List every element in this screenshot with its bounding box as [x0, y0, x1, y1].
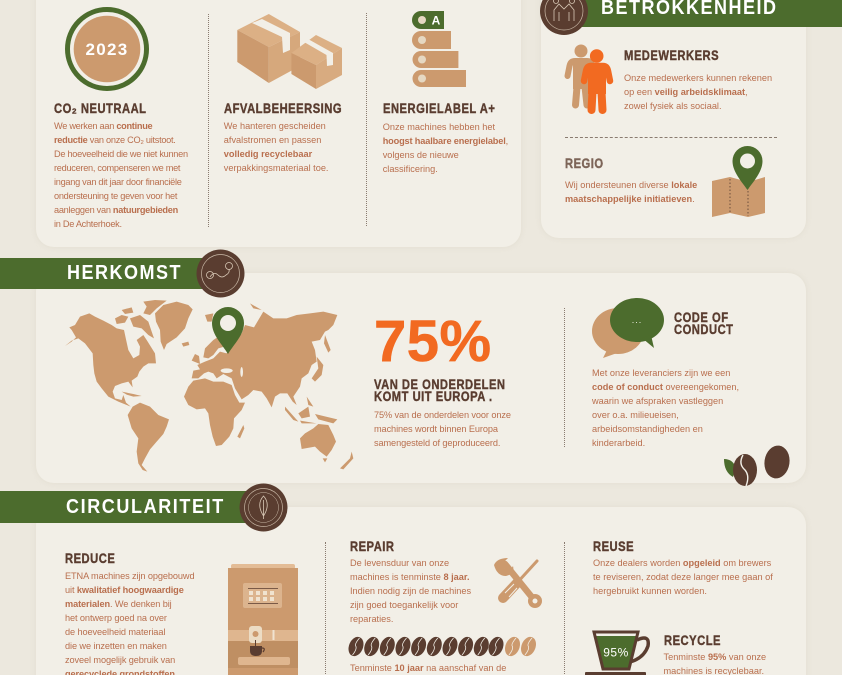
icon: speech bubbles: [592, 298, 664, 358]
text: code of conduct: kinderarbeid.: [592, 438, 645, 448]
divider: [565, 137, 777, 138]
text: reduce: uit kwalitatief hoogwaardige: [65, 585, 184, 595]
icon: route badge: [196, 250, 244, 298]
text: CO2 neutraal: aanleggen van natuurgebieden: [54, 205, 178, 215]
text: energielabel: volgens de nieuwe: [383, 150, 459, 160]
heading: van de onderdelen: VAN DE ONDERDELEN: [374, 377, 506, 392]
ribbon: betrokkenheid: [540, 0, 842, 35]
heading: afvalbeheersing: AFVALBEHEERSING: [224, 101, 342, 116]
ribbon bar: [570, 0, 842, 27]
text: regio: Wij ondersteunen diverse lokale: [565, 180, 697, 190]
heading: regio: REGIO: [565, 156, 604, 171]
text: reuse: te reviseren, zodat deze langer mee gaan of: [593, 572, 773, 582]
text: onderdelen: machines wordt binnen Europa: [374, 424, 498, 434]
heading: CO2 neutraal: CO₂ NEUTRAAL: [54, 101, 146, 116]
text: CO2 neutraal: De hoeveelheid die we niet kunnen: [54, 149, 188, 159]
text: onderdelen: 75% van de onderdelen voor onze: [374, 410, 511, 420]
chart: bean rating 10 of 12: [348, 636, 536, 656]
panel: milieu: [36, 0, 521, 247]
text: reduce: de hoeveelheid materiaal: [65, 627, 165, 637]
stat: 75%: 75%: [374, 309, 492, 374]
heading: medewerkers: MEDEWERKERS: [624, 48, 719, 63]
icon: 2023 badge: 2023: [85, 40, 129, 59]
text: code of conduct: waarin we afspraken vastleggen: [592, 396, 723, 406]
icon: coffee machine: [228, 564, 298, 675]
text: repair note: Tenminste 10 jaar na aanschaf van de: [350, 663, 506, 673]
text: onderdelen: [374, 410, 511, 448]
icon: energy label: A: [432, 14, 441, 28]
text: medewerkers: [624, 73, 772, 111]
text: reuse: [593, 558, 773, 596]
icon: wrench and screwdriver: [494, 558, 542, 608]
divider: [325, 542, 326, 675]
text: afvalbeheersing: verpakkingsmateriaal toe.: [224, 163, 328, 173]
icon: hands badge: [540, 0, 588, 35]
text: code of conduct: code of conduct overeengekomen,: [592, 382, 739, 392]
text: repair: zijn goed toegankelijk voor: [350, 600, 458, 610]
text: repair: De levensduur van onze: [350, 558, 449, 568]
heading: van de onderdelen: [374, 377, 506, 404]
divider: [564, 542, 565, 675]
divider: [208, 14, 209, 227]
icon: 2023 badge: [65, 7, 149, 91]
icon: map with pin: [712, 146, 765, 217]
panel: betrokkenheid: [541, 0, 806, 238]
text: code of conduct: [592, 368, 739, 448]
heading: energielabel: ENERGIELABEL A+: [383, 101, 495, 116]
panel: circulariteit: [36, 507, 806, 675]
icon: cardboard boxes: [237, 14, 342, 89]
text: medewerkers: op een veilig arbeidsklimaat,: [624, 87, 748, 97]
text: recycle: [664, 652, 766, 675]
ribbon: herkomst: [0, 250, 244, 298]
panel: herkomst: [36, 273, 806, 483]
text: energielabel: Onze machines hebben het: [383, 122, 495, 132]
heading: reuse: REUSE: [593, 539, 634, 554]
text: medewerkers: Onze medewerkers kunnen rekenen: [624, 73, 772, 83]
chart: world map: [65, 300, 354, 472]
text: repair: [350, 558, 471, 624]
text: code of conduct: arbeidsomstandigheden en: [592, 424, 703, 434]
text: CO2 neutraal: ingang van dit jaar door financiële: [54, 177, 182, 187]
heading: reduce: REDUCE: [65, 551, 115, 566]
text: CO2 neutraal: reductie van onze CO₂ uitstoot.: [54, 135, 176, 145]
text: code of conduct: Met onze leveranciers zijn we een: [592, 368, 730, 378]
text: afvalbeheersing: afvalstromen en passen: [224, 135, 321, 145]
text: reduce: materialen. We denken bij: [65, 599, 172, 609]
text: CO2 neutraal: in De Achterhoek.: [54, 219, 122, 229]
heading: code of conduct: CONDUCT: [674, 322, 734, 337]
text: CO2 neutraal: ondersteuning te geven voor het: [54, 191, 177, 201]
ribbon bar: [0, 491, 246, 523]
heading: code of conduct: CODE OF: [674, 310, 729, 325]
text: medewerkers: zowel fysiek als sociaal.: [624, 101, 722, 111]
icon: people: [564, 44, 614, 114]
text: code of conduct: over o.a. milieueisen,: [592, 410, 679, 420]
text: reduce: [65, 571, 194, 675]
ribbon bar: [0, 258, 205, 289]
text: repair: reparaties.: [350, 614, 393, 624]
text: recycle: Tenminste 95% van onze: [664, 652, 766, 662]
icon: leaf badge: [240, 484, 288, 532]
ribbon title: HERKOMST: [67, 262, 182, 284]
heading: code of conduct: [674, 310, 734, 337]
heading: repair: REPAIR: [350, 539, 394, 554]
text: reuse: hergebruikt kunnen worden.: [593, 586, 707, 596]
heading: recycle: RECYCLE: [664, 633, 721, 648]
heading: van de onderdelen: KOMT UIT EUROPA .: [374, 389, 493, 404]
divider: [564, 308, 565, 447]
text: repair: machines is tenminste 8 jaar.: [350, 572, 470, 582]
text: reduce: zoveel mogelijk gebruik van: [65, 655, 175, 665]
icon: energy label: [412, 11, 466, 87]
icon: coffee cup 95%: 95%: [603, 646, 629, 660]
text: regio: maatschappelijke initiatieven.: [565, 194, 695, 204]
text: reduce: die we inzetten en maken: [65, 641, 167, 651]
text: reduce: ETNA machines zijn opgebouwd: [65, 571, 194, 581]
text: onderdelen: samengesteld of geproduceerd.: [374, 438, 500, 448]
icon: speech bubbles: ...: [632, 315, 642, 325]
icon: coffee beans: [724, 446, 790, 486]
ribbon title: CIRCULARITEIT: [66, 496, 225, 518]
text: afvalbeheersing: We hanteren gescheiden: [224, 121, 326, 131]
text: reduce: het ontwerp goed na over: [65, 613, 167, 623]
text: CO2 neutraal: [54, 121, 188, 229]
text: afvalbeheersing: volledig recyclebaar: [224, 149, 312, 159]
text: CO2 neutraal: We werken aan continue: [54, 121, 152, 131]
ribbon: circulariteit: [0, 484, 288, 532]
icon: location pin: [212, 307, 244, 354]
text: reuse: Onze dealers worden opgeleid om brewers: [593, 558, 771, 568]
divider: [366, 13, 367, 226]
text: CO2 neutraal: reduceren, compenseren we met: [54, 163, 180, 173]
text: energielabel: classificering.: [383, 164, 438, 174]
text: afvalbeheersing: [224, 121, 328, 173]
text: energielabel: [382, 122, 508, 174]
text: regio: [565, 180, 697, 204]
icon: coffee cup 95%: [585, 630, 650, 675]
text: repair: Indien nodig zijn de machines: [350, 586, 471, 596]
text: energielabel: hoogst haalbare energielabel,: [383, 136, 508, 146]
